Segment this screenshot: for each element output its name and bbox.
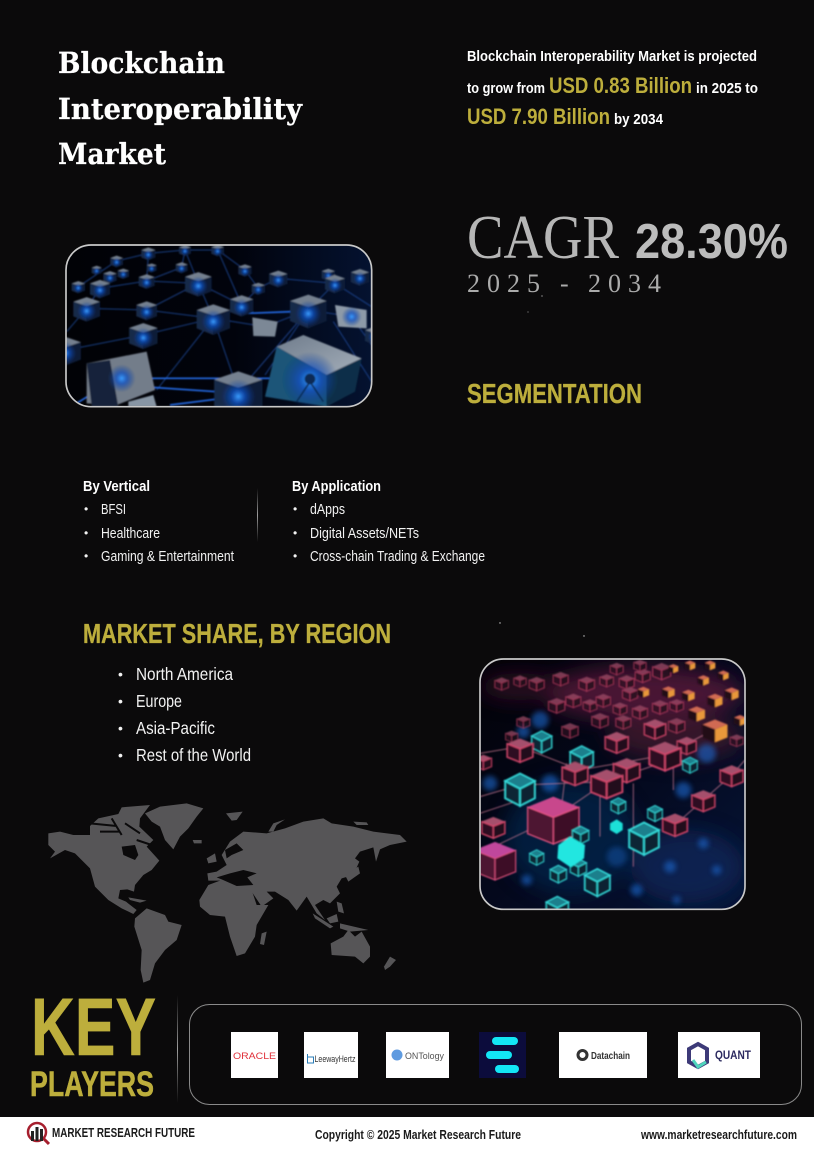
region list: • [118, 693, 123, 709]
logo: Oracle: ORACLE [233, 1051, 276, 1062]
image: neon pink and cyan cubes [474, 659, 746, 921]
region list: • [118, 747, 123, 763]
market projection text: Blockchain Interoperability Market is projected [467, 48, 757, 65]
logo: ONTology [386, 1032, 449, 1078]
title: Interoperability [58, 92, 303, 126]
logo: ONTology: ONTology [405, 1051, 444, 1062]
segment list: by application: • [293, 526, 297, 540]
CAGR figure: CAGR [467, 204, 620, 272]
footer brand: MARKET RESEARCH FUTURE [52, 1125, 195, 1140]
region list: North America [136, 664, 233, 684]
logo: Datachain: Datachain [591, 1051, 630, 1062]
CAGR figure: - [560, 269, 569, 298]
panel: key player logos [190, 1004, 802, 1104]
logo: Quant: QUANT [715, 1048, 752, 1062]
image: blockchain network blue cubes [65, 244, 372, 408]
segment list: by application: dApps [310, 502, 345, 518]
world map [48, 803, 407, 983]
logo: LeewayHertz: LeewayHertz [314, 1054, 356, 1064]
region list: • [118, 666, 123, 682]
region list: • [118, 720, 123, 736]
segment list: by application: Cross-chain Trading & Exchange [310, 549, 485, 565]
segment list: by vertical: BFSI [101, 502, 126, 518]
region list [118, 664, 251, 765]
logo: dark tile with cyan bars [479, 1032, 526, 1078]
title: Market [58, 137, 167, 171]
region list: Europe [136, 691, 182, 711]
region list: Asia-Pacific [136, 718, 215, 738]
icon: market research future logo [28, 1123, 49, 1144]
CAGR figure: 2034 [588, 269, 661, 298]
heading: segmentation: SEGMENTATION [467, 378, 642, 409]
footer copyright: Copyright © 2025 Market Research Future [315, 1127, 521, 1142]
logo: Datachain [559, 1032, 647, 1078]
title: Blockchain [58, 46, 225, 80]
CAGR figure: 28.30% [635, 215, 788, 269]
segment list: by application: Digital Assets/NETs [310, 526, 419, 542]
footer band [0, 1117, 814, 1150]
segment list: by application: • [293, 549, 297, 563]
logo: Quant [678, 1032, 760, 1078]
tiny specks [499, 295, 585, 637]
market projection text: by 2034 [614, 111, 664, 128]
segment list: by vertical: • [84, 549, 88, 563]
market projection text: USD 7.90 Billion [467, 104, 610, 129]
region list: Rest of the World [136, 745, 251, 765]
logo: LeewayHertz [304, 1032, 358, 1078]
segment list: by vertical: • [84, 526, 88, 540]
segment list: by application: By Application [292, 479, 381, 495]
heading: key players: PLAYERS [30, 1065, 154, 1104]
market projection text: in 2025 to [696, 80, 758, 97]
segment list: by vertical [83, 479, 234, 565]
market projection text: USD 0.83 Billion [549, 73, 692, 98]
title [58, 46, 303, 171]
heading: market share by region: MARKET SHARE, BY REGION [83, 618, 391, 649]
heading: key players [30, 982, 156, 1104]
segment list: by vertical: By Vertical [83, 479, 150, 495]
segment list: by vertical: • [84, 502, 88, 516]
logo: Oracle [231, 1032, 278, 1078]
segment list: by vertical: Gaming & Entertainment [101, 549, 234, 565]
segment list: by application: • [293, 502, 297, 516]
market projection text [467, 48, 758, 129]
market projection text: to grow from [467, 80, 545, 97]
segment list: by vertical: Healthcare [101, 526, 160, 542]
heading: key players: KEY [31, 982, 156, 1073]
segment list: by application [292, 479, 485, 565]
CAGR figure [467, 204, 788, 298]
CAGR figure: 2025 [467, 269, 540, 298]
